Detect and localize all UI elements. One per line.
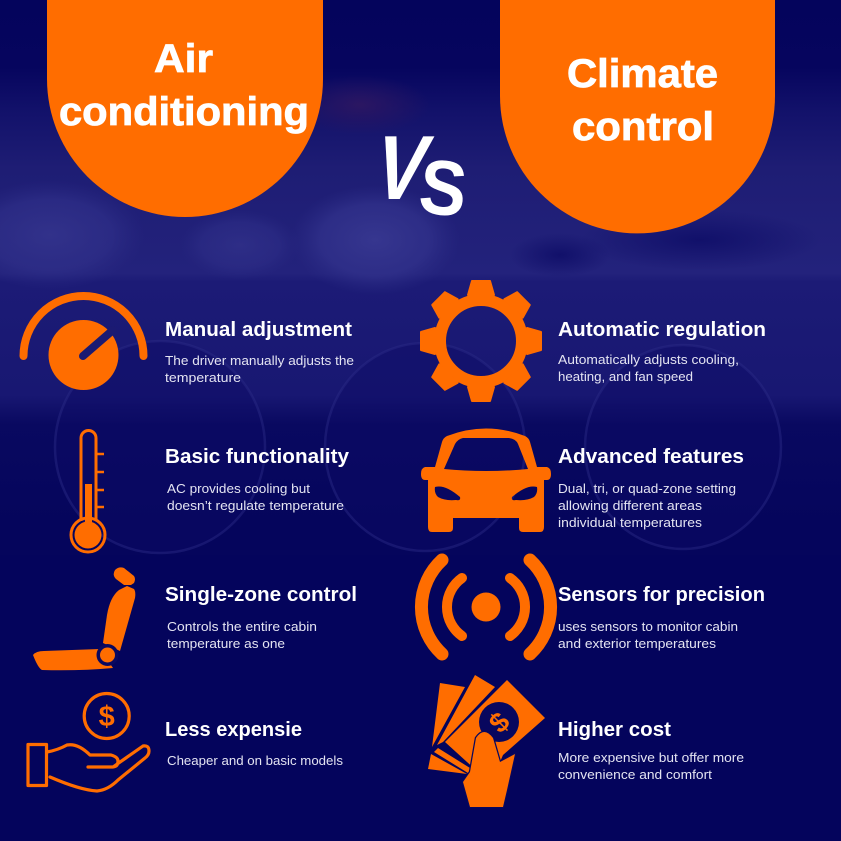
icon: car front	[421, 428, 551, 532]
text: higher cost: More expensive but offer more	[558, 750, 744, 765]
icon: hand with coin	[28, 694, 149, 791]
icon: thermometer	[71, 430, 105, 552]
text: less expensie: Less expensie	[165, 719, 302, 741]
versus label: V	[364, 118, 440, 219]
text: higher cost: convenience and comfort	[558, 767, 712, 782]
heading panel: air conditioning	[47, 0, 323, 217]
text: basic functionality: doesn’t regulate temperature	[167, 498, 344, 513]
title: climate control: control	[572, 105, 714, 149]
icon: gauge dial	[24, 296, 144, 390]
text: single-zone control: temperature as one	[167, 636, 285, 651]
text: manual adjustment: Manual adjustment	[165, 319, 352, 341]
text: advanced features: allowing different areas	[558, 498, 703, 513]
title: climate control: Climate	[567, 52, 718, 96]
text: basic functionality: AC provides cooling but	[167, 481, 310, 496]
icon: hand with coin: $	[99, 701, 115, 733]
text: automatic regulation: Automatically adjusts cooling,	[558, 352, 739, 367]
icon: hand holding cash	[428, 675, 545, 807]
text: sensors for precision: Sensors for precision	[558, 584, 765, 606]
text: automatic regulation	[558, 319, 766, 384]
text: advanced features	[558, 446, 744, 530]
text: sensors for precision	[558, 584, 765, 651]
versus label: S	[415, 142, 471, 234]
text: automatic regulation: Automatic regulation	[558, 319, 766, 341]
text: higher cost: Higher cost	[558, 719, 671, 741]
icon: gear	[421, 281, 541, 401]
text: higher cost	[558, 719, 744, 782]
text: less expensie: Cheaper and on basic models	[167, 753, 343, 768]
text: manual adjustment	[165, 319, 354, 385]
text: single-zone control	[165, 584, 357, 651]
text: sensors for precision: and exterior temperatures	[558, 636, 717, 651]
icon: car seat	[33, 567, 135, 670]
text: automatic regulation: heating, and fan speed	[558, 369, 693, 384]
text: less expensie	[165, 719, 343, 768]
text: advanced features: Advanced features	[558, 446, 744, 468]
text: manual adjustment: The driver manually adjusts the	[165, 353, 354, 368]
icon: hand holding cash: $	[483, 706, 516, 739]
title: air conditioning: Air	[154, 37, 213, 81]
versus label	[364, 118, 471, 234]
title: air conditioning: conditioning	[59, 90, 309, 134]
text: advanced features: Dual, tri, or quad-zone setting	[558, 481, 736, 496]
icon: radio signal sensor	[421, 560, 551, 654]
text: sensors for precision: uses sensors to monitor cabin	[558, 619, 738, 634]
text: advanced features: individual temperatures	[558, 515, 703, 530]
text: single-zone control: Controls the entire cabin	[167, 619, 317, 634]
text: basic functionality: Basic functionality	[165, 446, 350, 468]
text: manual adjustment: temperature	[165, 370, 241, 385]
heading panel: climate control	[500, 0, 775, 233]
text: basic functionality	[165, 446, 350, 513]
text: single-zone control: Single-zone control	[165, 584, 357, 606]
